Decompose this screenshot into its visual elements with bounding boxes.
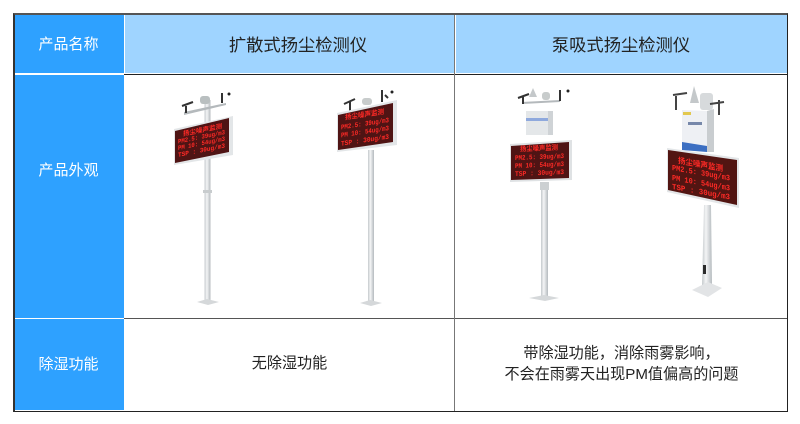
device 4: pump monitor with tall cabinet: [667, 86, 739, 297]
text: with dehumidification: 不会在雨雾天出现PM值偏高的问题: [505, 366, 738, 383]
sign text: 扬尘噪声监测: [345, 107, 384, 123]
LED sign: [510, 140, 572, 182]
sign text: PM2.5: 39ug/m3: [672, 164, 730, 183]
sign text: TSP : 30ug/m3: [178, 143, 225, 159]
sign text: 扬尘噪声监测: [520, 143, 558, 154]
sign text: PM 10: 54ug/m3: [341, 125, 389, 140]
heading: diffusion dust monitor: 扩散式扬尘检测仪: [229, 34, 367, 54]
label: product name: 产品名称: [38, 36, 98, 52]
sign text: [341, 106, 389, 149]
base: [360, 300, 382, 306]
heading: diffusion dust monitor: [125, 15, 454, 73]
text: with dehumidification: 带除湿功能，消除雨雾影响，: [523, 345, 720, 362]
sign text: PM2.5: 39ug/m3: [515, 153, 564, 163]
sign text: [178, 121, 225, 159]
device 2: diffusion monitor with large sign: [337, 90, 397, 306]
row divider above last row: [124, 318, 788, 319]
LED sign: [337, 100, 397, 152]
label: dehumidification: 除湿功能: [38, 356, 98, 372]
pole: [702, 205, 712, 285]
sign text: TSP : 30ug/m3: [341, 134, 389, 149]
label: product name: [15, 15, 124, 73]
label: dehumidification: [15, 319, 124, 410]
sign text: TSP : 30ug/m3: [672, 183, 730, 202]
pole: [368, 150, 374, 303]
label: product appearance: [15, 75, 124, 318]
sign text: PM 10: 54ug/m3: [178, 136, 225, 152]
heading: pump suction dust monitor: 泵吸式扬尘检测仪: [552, 34, 690, 54]
sensor arm: [184, 103, 226, 115]
sign text: PM 10: 54ug/m3: [672, 174, 730, 193]
base: [197, 299, 219, 305]
sensors: [362, 98, 372, 105]
sensors: [522, 101, 560, 103]
text: with dehumidification: [505, 344, 738, 383]
sign text: 扬尘噪声监测: [678, 155, 723, 174]
LED sign: [667, 148, 739, 208]
pole: [541, 182, 548, 297]
label: product appearance: 产品外观: [38, 162, 98, 179]
base: [692, 282, 722, 297]
cabinet: [682, 110, 707, 152]
heading: pump suction dust monitor: [456, 15, 787, 73]
sensors: [690, 86, 699, 103]
device 1: diffusion monitor on pole: [174, 92, 233, 305]
sign text: PM 10: 54ug/m3: [515, 161, 564, 171]
row divider under header: [124, 74, 788, 75]
cabinet: [526, 111, 553, 135]
device 3: pump monitor with cabinet: [510, 88, 572, 301]
LED sign: [174, 116, 233, 165]
text: no dehumidification: 无除湿功能: [252, 354, 327, 372]
sign text: 扬尘噪声监测: [183, 121, 222, 138]
sign text: [515, 143, 564, 179]
sign text: PM2.5: 39ug/m3: [178, 129, 225, 145]
pole: [204, 100, 210, 302]
sign text: [672, 154, 730, 202]
sign text: TSP : 30ug/m3: [515, 169, 564, 179]
door: [703, 265, 706, 274]
sign text: PM2.5: 39ug/m3: [341, 117, 389, 132]
base: [529, 295, 559, 301]
column divider: [454, 14, 455, 411]
